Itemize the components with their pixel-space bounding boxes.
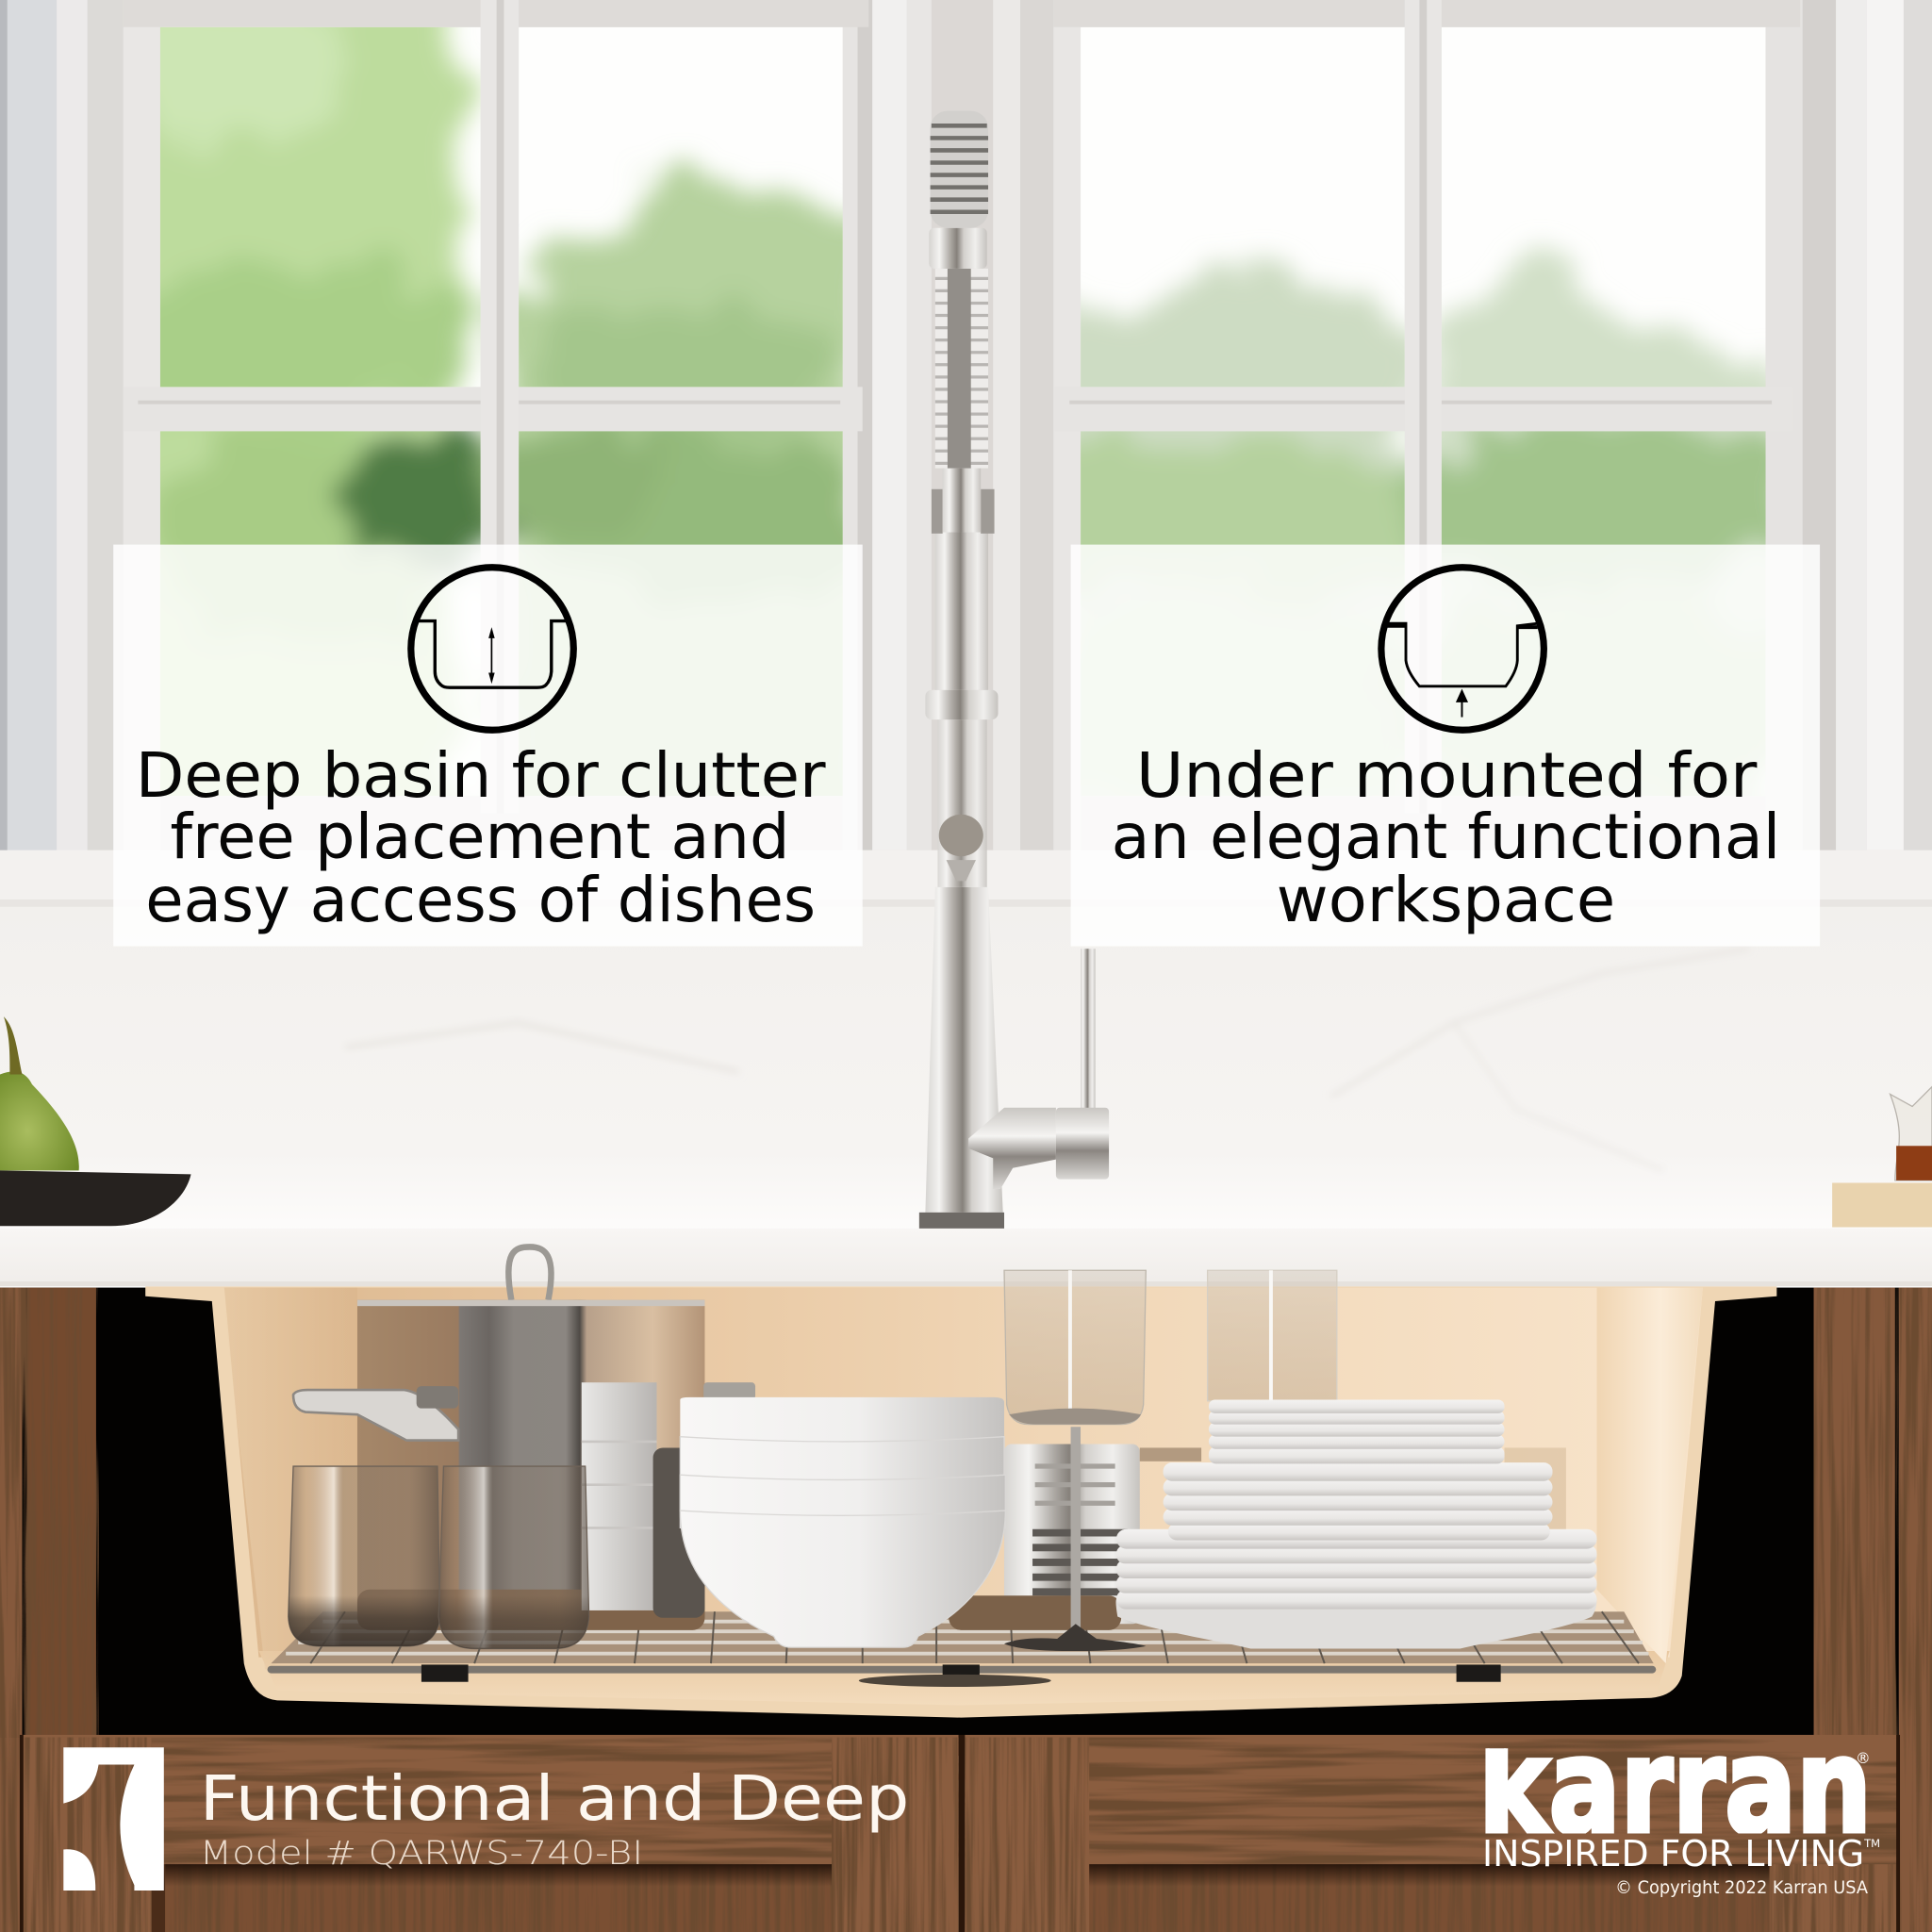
rack front rail: [268, 1666, 1656, 1674]
wire rack: [268, 1611, 1656, 1687]
drain: [859, 1675, 1051, 1687]
sink back wall: [224, 1288, 1703, 1658]
footer title: Functional and Deep: [200, 1762, 909, 1835]
sink basin: [145, 1286, 1776, 1718]
window wall background: [0, 0, 1932, 863]
pot lid handle: [508, 1247, 552, 1300]
pear in black bowl: [0, 1016, 191, 1226]
sink floor: [258, 1651, 1670, 1706]
window view: left panes with blurred trees: [160, 26, 843, 796]
icon: under mounted basin with arrow: [1381, 568, 1544, 730]
window sill: [0, 850, 1932, 908]
Karran logo: [1485, 1748, 1879, 1867]
logo tagline: INSPIRED FOR LIVING: [1482, 1833, 1864, 1875]
bottom plate stack: [1115, 1529, 1597, 1648]
rack clips: [421, 1664, 469, 1682]
caption: deep basin: [136, 739, 826, 936]
pot side handle: [293, 1390, 458, 1441]
wine glass: [1004, 1270, 1146, 1651]
dark jar: [653, 1447, 704, 1618]
sink right side wall: [1597, 1288, 1703, 1663]
caption: under mounted: Under mounted for: [1136, 739, 1758, 812]
side cabinet wood: [0, 1288, 1932, 1932]
caption: deep basin: Deep basin for clutter: [136, 739, 826, 812]
window view: right panes with blurred trees: [1081, 26, 1765, 605]
metal saucepan at the back: [949, 1445, 1201, 1630]
stacked plates: [1115, 1399, 1597, 1648]
sink left side wall: [222, 1288, 357, 1670]
marble backsplash: [0, 907, 1932, 1233]
top plate stack: [1209, 1399, 1505, 1463]
middle plate stack: [1164, 1462, 1553, 1540]
copyright line: © Copyright 2022 Karran USA: [1615, 1877, 1868, 1898]
oil cruet and wooden board: [1832, 1087, 1932, 1228]
sink outer shell: [145, 1286, 1776, 1718]
right cabinet door: [959, 1735, 1900, 1932]
caption: under mounted: [1112, 739, 1780, 936]
footer model number: Model # QARWS-740-BI: [200, 1835, 643, 1873]
left cabinet door: [20, 1735, 959, 1932]
countertop: [0, 1229, 1932, 1286]
pot body: [357, 1300, 704, 1614]
cooking pot with lid: [293, 1247, 755, 1630]
callout panel: deep basin: [113, 545, 863, 947]
logo registered mark: ®: [1856, 1749, 1871, 1767]
caption: deep basin: free placement and: [170, 801, 790, 873]
caption: under mounted: an elegant functional: [1112, 801, 1780, 873]
icon: Karran K emblem: [63, 1747, 164, 1891]
icon: deep basin with double arrow: [411, 568, 573, 730]
faucet lever: [968, 1108, 1056, 1189]
faucet rod: [1081, 949, 1096, 1109]
stacked white cups: [582, 1382, 657, 1610]
clear tumbler: [1208, 1270, 1337, 1401]
faucet: [919, 111, 1109, 1230]
logo trademark: TM: [1863, 1837, 1880, 1850]
caption: deep basin: easy access of dishes: [145, 864, 816, 936]
dark cabinet cavity: [0, 1288, 1932, 1756]
caption: under mounted: workspace: [1277, 864, 1615, 936]
smoked glass tumblers: [289, 1466, 589, 1648]
stacked white bowls: [680, 1397, 1005, 1647]
glass behind plates: [1505, 1447, 1566, 1531]
callout panel: under mounted: [1071, 545, 1820, 947]
